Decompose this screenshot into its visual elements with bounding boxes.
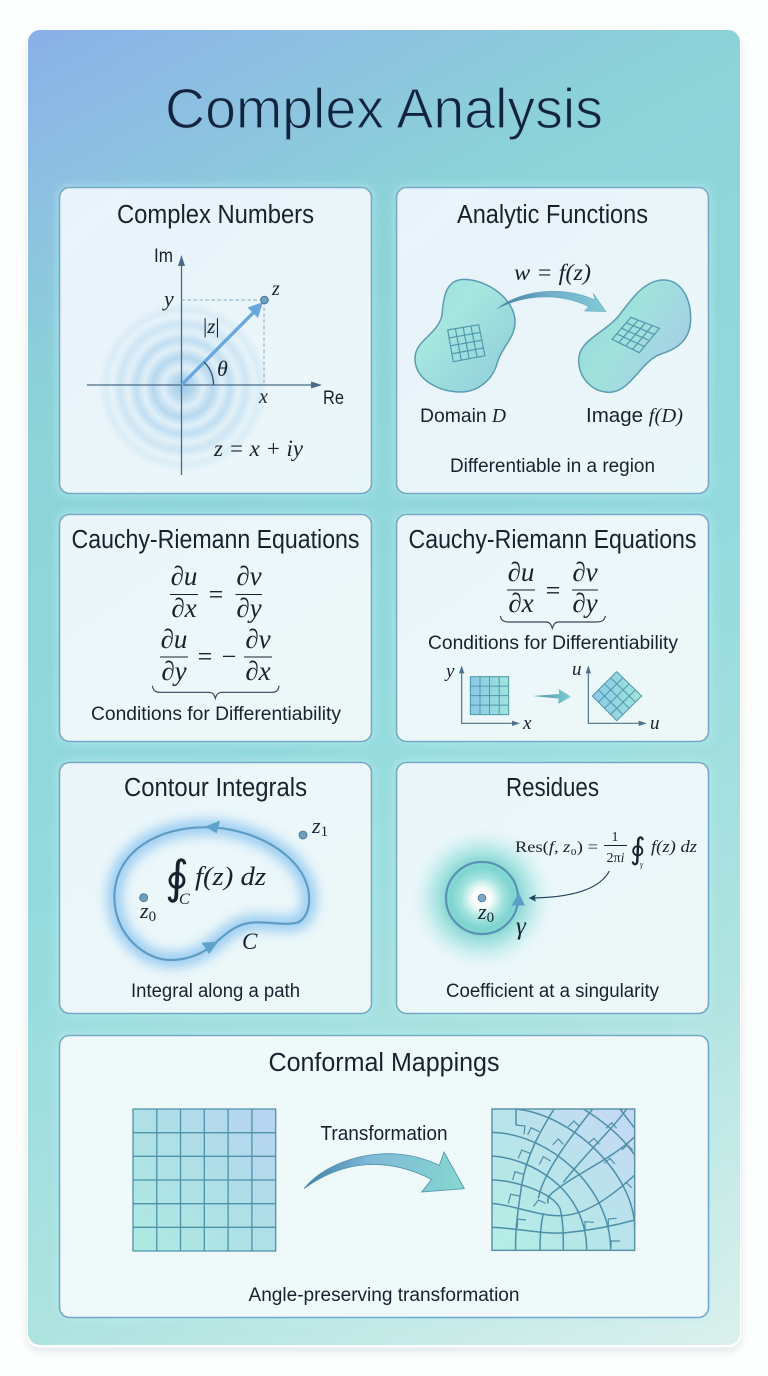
axis and point labels: y xyxy=(162,286,174,311)
panel: conformal mappings xyxy=(57,1033,711,1320)
panel: analytic functions xyxy=(394,185,711,496)
label: z0: z xyxy=(478,899,487,924)
pointer arrow xyxy=(529,871,609,902)
brace xyxy=(500,616,605,628)
equation 1 xyxy=(170,561,262,623)
vector to z xyxy=(182,296,268,385)
right-angle markers xyxy=(508,1121,633,1250)
panel: complex numbers xyxy=(57,185,374,496)
equation 2: ∂v xyxy=(245,624,271,654)
contour glow xyxy=(114,827,309,960)
source axes xyxy=(462,668,643,723)
heading: contour integrals: Contour Integrals xyxy=(124,774,307,802)
equation 1: ∂v xyxy=(236,561,262,591)
image blob xyxy=(579,280,691,392)
residue formula: Res( f, z₀) = xyxy=(515,839,598,856)
caption: integral along a path: Integral along a path xyxy=(131,981,300,1002)
axis and point labels: θ xyxy=(217,356,228,381)
contour arrowhead xyxy=(512,892,525,906)
equation: = xyxy=(546,576,560,605)
transformation arrow xyxy=(304,1152,464,1192)
residue formula: 2πi xyxy=(607,851,625,866)
singularity glow xyxy=(408,824,556,972)
dashed projections xyxy=(182,300,264,385)
equation 1: = xyxy=(209,580,223,609)
domain blob xyxy=(415,279,515,392)
label: z1: 1 xyxy=(321,824,328,840)
residue formula: γ xyxy=(640,860,644,869)
equation 1: ∂y xyxy=(236,593,262,623)
contour diagram xyxy=(114,821,309,960)
axis and point labels xyxy=(154,245,344,409)
square grid xyxy=(133,1109,276,1251)
circular contour gamma xyxy=(446,862,518,934)
equation 2: ∂x xyxy=(245,656,271,686)
point z0 xyxy=(140,894,148,902)
equation 2: ∂u xyxy=(161,624,187,654)
contour path xyxy=(114,827,309,960)
equation 2: − xyxy=(222,642,236,671)
contour arrowheads xyxy=(202,821,220,954)
transform arrow xyxy=(533,689,571,704)
source grid lines xyxy=(470,677,509,715)
residue formula xyxy=(515,830,698,869)
panel: residues xyxy=(394,760,711,1016)
formula: z = x + iy: z = x + iy xyxy=(213,436,304,461)
heading: residues: Residues xyxy=(506,774,599,802)
source grid xyxy=(470,677,509,715)
integral formula: f(z) dz xyxy=(195,862,266,891)
equation: ∂v xyxy=(572,557,598,587)
point z1 xyxy=(299,831,307,839)
equation 2 xyxy=(160,624,272,686)
target diamond lines xyxy=(592,672,642,721)
caption: differentiable in a region: Differentiable in a region xyxy=(450,456,655,477)
label: domain D: Domain D xyxy=(420,405,506,427)
label: z0: 0 xyxy=(487,910,494,926)
angle arc xyxy=(204,362,214,385)
mapped grid curves xyxy=(492,1109,635,1250)
caption: conditions: Conditions for Differentiability xyxy=(428,633,678,654)
residue formula: 1 xyxy=(612,830,618,845)
domain grid xyxy=(448,325,485,362)
image grid xyxy=(612,317,659,353)
heading: complex numbers: Complex Numbers xyxy=(117,201,314,229)
equation: ∂u xyxy=(508,557,534,587)
equation: ∂x xyxy=(508,588,534,618)
panel: cauchy-riemann equations left xyxy=(57,512,374,744)
label: z0: 0 xyxy=(149,909,156,925)
axis labels: y xyxy=(444,661,455,682)
axis labels xyxy=(444,659,660,734)
mini mapping diagram xyxy=(459,665,647,726)
integral formula xyxy=(165,850,266,908)
singularity point xyxy=(478,894,486,902)
panel: contour integrals xyxy=(57,760,374,1016)
concentric ripple rings xyxy=(98,302,268,472)
axis and point labels: Im xyxy=(154,245,173,267)
equation: ∂y xyxy=(572,588,598,618)
axis and point labels: Re xyxy=(323,387,344,409)
heading: cauchy-riemann right: Cauchy-Riemann Equations xyxy=(408,526,696,554)
label: C: C xyxy=(242,929,258,954)
panel: cauchy-riemann equations right xyxy=(394,512,711,744)
caption: conditions: Conditions for Differentiability xyxy=(91,704,341,725)
caption: coefficient at a singularity: Coefficient at a singularity xyxy=(446,981,659,1002)
label: gamma: γ xyxy=(516,913,527,940)
label: image f(D): Image f(D) xyxy=(586,405,683,427)
label: transformation: Transformation xyxy=(320,1123,448,1145)
axis arrowheads xyxy=(459,665,647,726)
argand diagram axes xyxy=(87,255,322,475)
axis labels: u xyxy=(650,713,660,734)
equation 2: ∂y xyxy=(161,656,187,686)
mapping arrow xyxy=(497,291,606,312)
heading: analytic functions: Analytic Functions xyxy=(457,201,648,229)
label: z1: z xyxy=(312,813,321,838)
mapped grid border xyxy=(492,1109,635,1250)
integral formula: ∮ xyxy=(165,850,189,904)
equation xyxy=(507,557,598,618)
equation 1: ∂u xyxy=(171,561,197,591)
title: Complex Analysis xyxy=(165,77,603,141)
axis labels: x xyxy=(522,713,532,734)
axis and point labels: |z| xyxy=(203,314,220,338)
label: z0: z xyxy=(140,898,149,923)
equation 1: ∂x xyxy=(171,593,197,623)
mapped grid fill xyxy=(492,1109,635,1250)
heading: conformal mappings: Conformal Mappings xyxy=(268,1049,500,1077)
equation 2: = xyxy=(198,642,212,671)
residue formula: ∮ xyxy=(630,832,646,867)
axis and point labels: x xyxy=(258,386,268,408)
brace xyxy=(152,686,279,698)
formula: w = f(z): w = f(z) xyxy=(514,260,591,285)
conformally mapped grid xyxy=(492,1109,635,1250)
caption: angle-preserving transformation: Angle-preserving transformation xyxy=(248,1285,520,1306)
axis and point labels: z xyxy=(271,278,280,300)
diagram: domain to image mapping xyxy=(415,279,691,392)
residue formula: f(z) dz xyxy=(651,837,698,856)
axis labels: u xyxy=(572,659,582,680)
target diamond xyxy=(592,672,642,721)
integral formula: C xyxy=(179,891,190,908)
heading: cauchy-riemann left: Cauchy-Riemann Equations xyxy=(72,526,360,554)
